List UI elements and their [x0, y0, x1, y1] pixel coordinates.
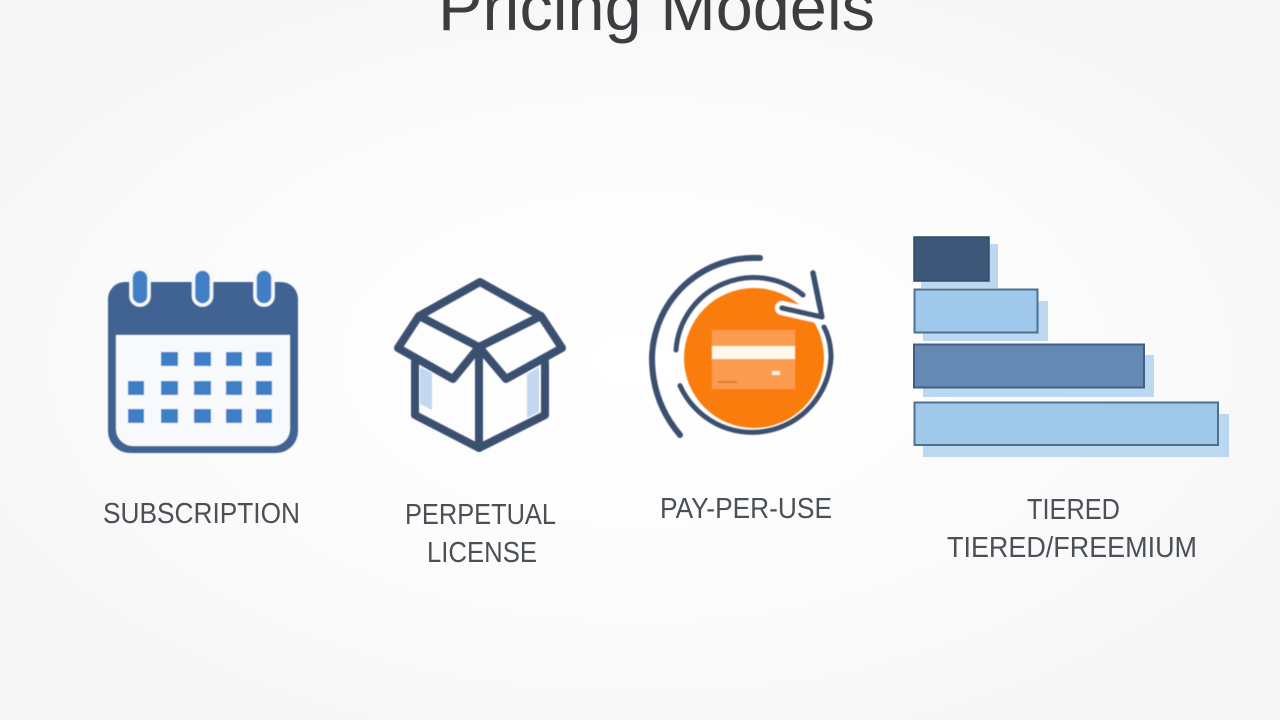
label: tiered / freemium: TIERED/FREEMIUM [947, 532, 1197, 564]
label: perpetual license: LICENSE [427, 537, 537, 569]
chart icon: tiered bars [914, 237, 1229, 457]
tier bar 3 [914, 344, 1154, 397]
label: perpetual license: PERPETUAL [405, 499, 556, 531]
label: perpetual license [405, 499, 556, 569]
icon: calendar (subscription) [108, 269, 298, 453]
icon: credit card in circular arrow (pay-per-use) [652, 258, 831, 435]
label: tiered / freemium [947, 494, 1197, 564]
label: pay-per-use: PAY-PER-USE [660, 493, 832, 525]
icon: open box (perpetual license) [398, 282, 562, 448]
tier bar 2 [914, 290, 1048, 341]
tier bar 1 [914, 237, 998, 288]
label: subscription: SUBSCRIPTION [103, 498, 300, 530]
label: tiered / freemium: TIERED [1027, 494, 1120, 526]
tier bar 4 [914, 402, 1229, 457]
